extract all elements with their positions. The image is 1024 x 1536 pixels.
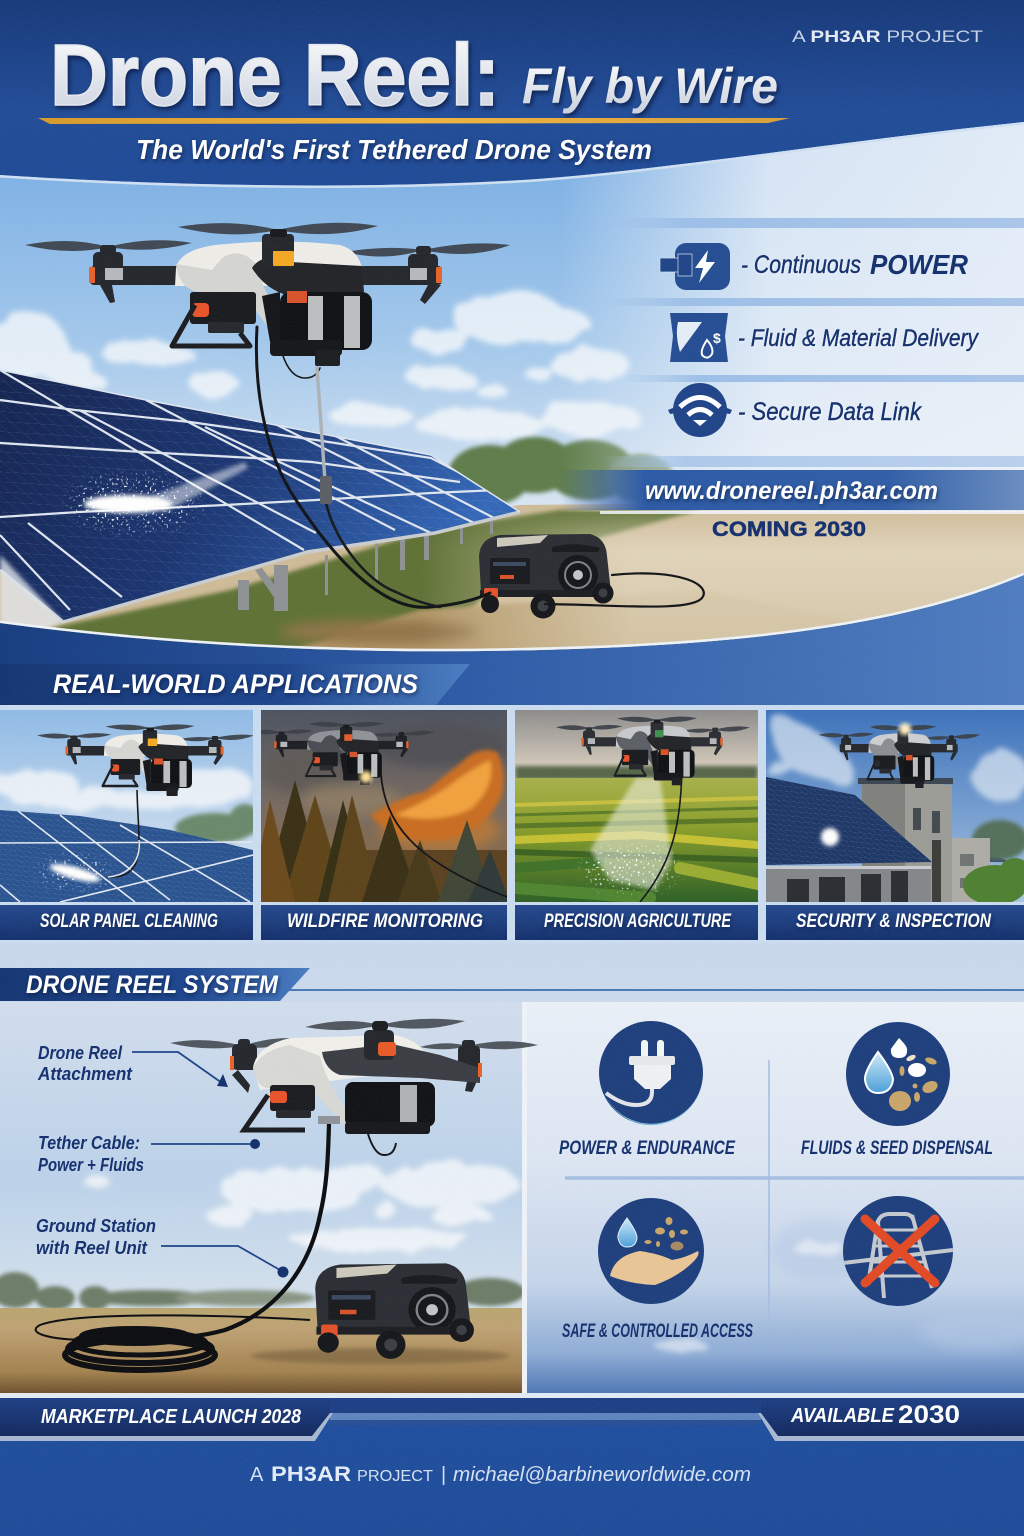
treeline xyxy=(0,1272,525,1310)
panel: benefits xyxy=(522,1002,1024,1393)
right sand ground xyxy=(420,505,1024,655)
caption xyxy=(261,905,507,940)
title: Drone Reel: xyxy=(50,27,500,124)
icon: safe controlled access xyxy=(598,1198,704,1304)
ribbon: marketplace launch xyxy=(0,1398,333,1441)
title tagline: Fly by Wire xyxy=(522,58,778,114)
icon: power plug xyxy=(660,243,730,290)
header background xyxy=(0,0,1024,200)
ground xyxy=(0,1308,522,1393)
scene xyxy=(0,710,261,902)
icon: fluid delivery xyxy=(670,313,728,362)
url banner: www.dronereel.ph3ar.com xyxy=(645,477,938,505)
icon: power plug xyxy=(599,1021,703,1125)
heading: real-world applications xyxy=(0,664,470,705)
url banner xyxy=(560,470,1024,514)
footer credit xyxy=(250,1463,751,1486)
footer xyxy=(0,1393,1024,1536)
caption xyxy=(766,905,1024,940)
footer credit: PH3AR xyxy=(271,1463,351,1486)
panel: security and inspection xyxy=(766,710,1024,940)
icon: no ladders xyxy=(843,1196,953,1306)
section line xyxy=(285,989,1024,991)
coiled tether xyxy=(36,1123,329,1370)
caption: PRECISION AGRICULTURE xyxy=(544,911,732,932)
panel: precision agriculture xyxy=(515,710,758,940)
mid blue background band xyxy=(0,560,1024,710)
label: power and endurance: POWER & ENDURANCE xyxy=(559,1138,736,1159)
gold divider xyxy=(38,118,790,124)
callout: tether cable: Tether Cable: xyxy=(38,1133,140,1153)
panel: hero scene xyxy=(0,120,1024,660)
callout: tether cable xyxy=(38,1133,260,1175)
callout: tether cable: Power + Fluids xyxy=(38,1155,144,1175)
panel: wildfire monitoring xyxy=(250,710,510,940)
callout: drone reel attachment: Drone Reel xyxy=(38,1043,123,1063)
hero curve border xyxy=(0,122,1024,185)
caption: WILDFIRE MONITORING xyxy=(287,911,483,932)
header xyxy=(38,27,983,165)
icon: secure data link xyxy=(668,383,732,437)
scene xyxy=(766,710,1024,905)
panel: feature list xyxy=(560,218,1024,541)
distant trees xyxy=(448,437,674,505)
footer credit: michael@barbineworldwide.com xyxy=(453,1464,751,1486)
footer credit: A xyxy=(250,1464,264,1486)
ribbon: available 2030 xyxy=(758,1398,1024,1441)
ground station xyxy=(479,534,614,618)
clouds xyxy=(0,292,640,441)
footer credit: PROJECT xyxy=(357,1468,433,1485)
center inset strip xyxy=(320,1398,770,1425)
ground station xyxy=(315,1263,474,1359)
ribbon: available 2030: AVAILABLE xyxy=(790,1405,895,1427)
callout: drone reel attachment xyxy=(37,1043,228,1087)
right pale fade xyxy=(560,120,1024,512)
ground xyxy=(0,500,1024,660)
applications backing strip xyxy=(0,705,1024,945)
ribbon: available 2030: 2030 xyxy=(898,1401,960,1429)
tether cables xyxy=(256,327,704,607)
scene xyxy=(250,710,510,902)
feature: continuous power: - Continuous xyxy=(741,251,861,279)
feature: fluid and material delivery: - Fluid & Material Delivery xyxy=(738,325,980,352)
heading: drone reel system: DRONE REEL SYSTEM xyxy=(26,971,279,999)
panel: solar panel cleaning xyxy=(0,710,261,940)
panel: system diagram scene xyxy=(0,1084,522,1393)
caption: SOLAR PANEL CLEANING xyxy=(40,911,218,932)
caption xyxy=(515,905,758,940)
feature: secure data link: - Secure Data Link xyxy=(738,398,922,426)
launch date: COMING 2030 xyxy=(712,518,866,541)
callout: ground station: with Reel Unit xyxy=(36,1238,148,1258)
clouds xyxy=(84,1163,520,1252)
callout: ground station: Ground Station xyxy=(36,1216,156,1236)
project tag: A PH3AR PROJECT xyxy=(792,27,983,46)
callout: ground station xyxy=(36,1216,288,1278)
system drone xyxy=(170,1019,538,1155)
label: safe and controlled access: SAFE & CONTROLLED ACCESS xyxy=(562,1321,753,1342)
feature: power emphasis: POWER xyxy=(870,249,969,280)
ribbon: marketplace launch: MARKETPLACE LAUNCH 2028 xyxy=(41,1406,302,1428)
subtitle: The World's First Tethered Drone System xyxy=(136,134,652,165)
drone xyxy=(25,223,510,366)
scene xyxy=(515,710,758,902)
caption xyxy=(0,905,253,940)
callout: drone reel attachment: Attachment xyxy=(37,1064,133,1084)
section background: drone reel system xyxy=(0,943,1024,1398)
water spray xyxy=(69,462,248,531)
heading: real-world applications: REAL-WORLD APPLICATIONS xyxy=(53,669,418,699)
solar panel xyxy=(0,360,530,632)
icon: fluids and seeds xyxy=(846,1022,950,1126)
footer credit: | xyxy=(441,1464,446,1486)
solar array supports xyxy=(238,520,493,611)
icon: fluid delivery: $ xyxy=(713,330,721,346)
